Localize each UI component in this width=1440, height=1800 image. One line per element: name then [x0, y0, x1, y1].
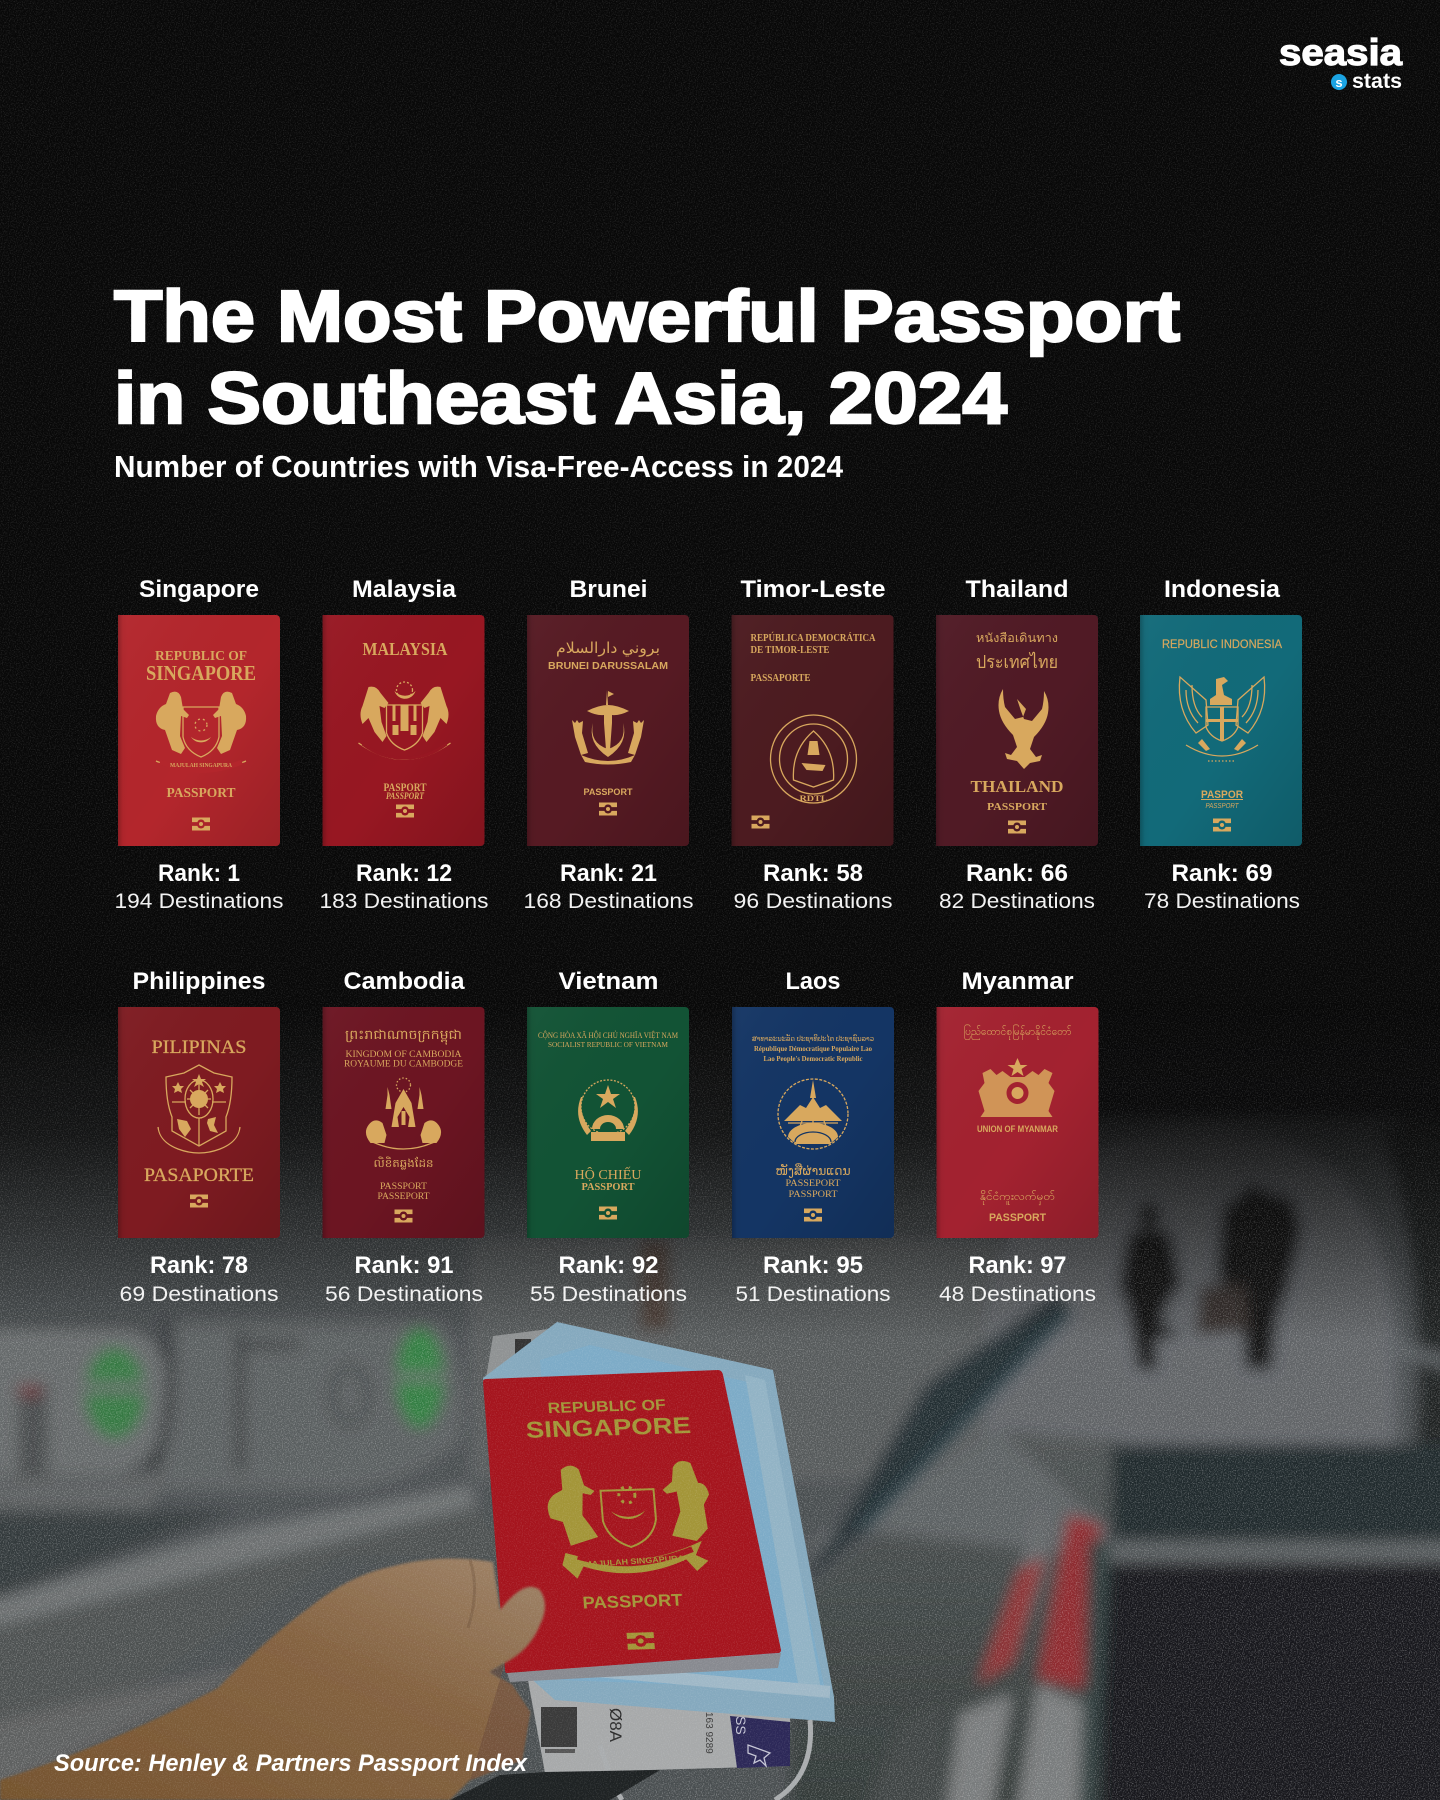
passport: Vietnam: HỘ CHIẾU [574, 1166, 642, 1183]
passport: Cambodia: PASSPORT [380, 1181, 428, 1191]
passport: Myanmar: PASSPORT [989, 1212, 1046, 1224]
passport: Laos: PASSEPORT [786, 1179, 841, 1189]
boarding pass bottom [527, 1675, 790, 1773]
destinations: 194 Destinations [114, 889, 284, 913]
card: Myanmar [936, 968, 1098, 1306]
dark gap below pass [450, 1770, 660, 1800]
rank: Rank: 69 [1172, 860, 1272, 887]
card: Thailand [936, 576, 1098, 913]
passport: Laos: ສາທາລະນະລັດ ປະຊາທິປະໄຕ ປະຊາຊົນລາວ [752, 1033, 874, 1043]
passport: Myanmar: UNION OF MYANMAR [977, 1124, 1058, 1135]
country name: Laos [786, 968, 840, 995]
passport: Thailand: PASSPORT [987, 801, 1048, 813]
card: Vietnam [527, 968, 689, 1306]
passport: Indonesia: PASPOR [1201, 789, 1243, 801]
logo: seasia stats: stats [1352, 70, 1402, 93]
card: Philippines [118, 968, 280, 1306]
passport: Cambodia: PASSEPORT [378, 1191, 430, 1201]
passport: Indonesia: PASSPORT [1206, 801, 1240, 810]
passport: Malaysia [322, 615, 484, 846]
passport: Laos: PASSPORT [788, 1190, 838, 1200]
title: in Southeast Asia, 2024 [114, 359, 1007, 439]
rank: Rank: 78 [150, 1252, 248, 1279]
hero passport: Singapore: SINGAPORE [525, 1412, 692, 1443]
destinations: 56 Destinations [325, 1282, 483, 1306]
passport: Cambodia: ROYAUME DU CAMBODGE [344, 1060, 463, 1070]
face mask [483, 1322, 835, 1800]
destinations: 69 Destinations [120, 1282, 278, 1306]
centre wall [470, 1240, 1030, 1480]
passport: Indonesia: REPUBLIC INDONESIA [1162, 639, 1282, 651]
boarding pass bottom: SS [733, 1716, 749, 1735]
card: Cambodia [322, 968, 484, 1306]
left handrail [0, 1470, 170, 1510]
card: Indonesia [1140, 576, 1302, 913]
passport: Timor-Leste: DE TIMOR-LESTE [750, 645, 830, 656]
destinations: 48 Destinations [939, 1282, 1096, 1306]
passport: Brunei: بروني دارالسلام [556, 640, 660, 658]
passport: Malaysia: PASPORT [384, 780, 426, 794]
passport: Vietnam: PASSPORT [582, 1182, 634, 1193]
title: The Most Powerful Passport [114, 277, 1180, 357]
passport: Timor-Leste: REPÚBLICA DEMOCRÁTICA [750, 632, 876, 644]
passport: Malaysia: MALAYSIA [362, 639, 448, 659]
passport: Thailand [936, 615, 1098, 846]
card: Malaysia [320, 576, 488, 913]
passport: Timor-Leste [732, 615, 894, 846]
rank: Rank: 95 [763, 1252, 863, 1279]
passport: Vietnam: CỘNG HÒA XÃ HỘI CHỦ NGHĨA VIỆT NAM [538, 1030, 678, 1040]
passport: Laos: République Démocratique Populaire Lao [754, 1045, 872, 1053]
country name: Brunei [570, 576, 648, 603]
rank: Rank: 97 [968, 1252, 1066, 1279]
card: Timor-Leste [732, 576, 894, 913]
country name: Thailand [966, 576, 1068, 603]
rank: Rank: 91 [354, 1252, 454, 1279]
passport: Thailand: ประเทศไทย [976, 651, 1058, 672]
rank: Rank: 92 [558, 1252, 658, 1279]
hero passport: Singapore [483, 1370, 781, 1682]
passport: Philippines: PASAPORTE [144, 1165, 254, 1186]
card: Brunei [524, 576, 694, 913]
boarding pass bottom: 163 9289 [703, 1712, 714, 1754]
boarding pass bottom: Ø8A [606, 1708, 625, 1743]
passport: Timor-Leste: RDTL [800, 794, 828, 803]
card: Singapore [114, 576, 284, 913]
country name: Philippines [132, 968, 266, 995]
passport: Laos: ໜັງສືຜ່ານແດນ [776, 1163, 851, 1178]
subtitle: Number of Countries with Visa-Free-Access in 2024 [114, 449, 844, 484]
hero passport: Singapore: REPUBLIC OF [547, 1397, 666, 1417]
boarding pass top [486, 1328, 560, 1378]
passport: Singapore: REPUBLIC OF [155, 649, 247, 664]
destinations: 96 Destinations [734, 889, 892, 913]
passport: Malaysia: PASSPORT [386, 792, 425, 802]
rank: Rank: 12 [356, 860, 452, 887]
passport: Myanmar: နိုင်ငံကူးလက်မှတ် [980, 1190, 1055, 1205]
country name: Myanmar [962, 968, 1074, 995]
passport: Brunei [527, 615, 689, 846]
passport: Philippines: PILIPINAS [152, 1037, 246, 1058]
passport: Thailand: THAILAND [970, 777, 1064, 796]
logo: seasia stats: seasia [1279, 32, 1402, 73]
country name: Indonesia [1164, 576, 1281, 603]
destinations: 51 Destinations [736, 1282, 890, 1306]
hero passport: Singapore: MAJULAH SINGAPURA [584, 1554, 685, 1569]
country name: Timor-Leste [740, 576, 886, 603]
rank: Rank: 21 [560, 860, 657, 887]
logo dot: s [1335, 75, 1343, 90]
passport: Singapore: PASSPORT [166, 785, 236, 800]
country name: Malaysia [352, 576, 457, 603]
passport: Cambodia: KINGDOM OF CAMBODIA [346, 1050, 462, 1060]
passport: Myanmar [936, 1007, 1098, 1238]
rank: Rank: 66 [966, 860, 1068, 887]
passport: Cambodia [322, 1007, 484, 1238]
red panels [1018, 1539, 1052, 1602]
country name: Vietnam [558, 968, 658, 995]
passport: Laos: Lao People's Democratic Republic [764, 1055, 862, 1063]
passport: Singapore: MAJULAH SINGAPURA [170, 763, 233, 769]
left glass balustrade [0, 1325, 172, 1478]
rank: Rank: 1 [158, 860, 240, 887]
passport: Singapore [118, 615, 280, 846]
background photo: airport walkway [0, 1063, 1440, 1800]
centre floor [790, 1430, 1120, 1800]
photo: boarding pass and face mask [0, 1322, 835, 1800]
travellers [1137, 1202, 1161, 1226]
card: Laos [732, 968, 894, 1306]
passport: Indonesia [1140, 615, 1302, 846]
passport: Brunei: PASSPORT [584, 787, 633, 798]
passport: Cambodia: លិខិតឆ្លងដែន [374, 1156, 434, 1170]
moving walkway rail [800, 1290, 1070, 1590]
arch wall [986, 1174, 1400, 1451]
hero passport: Singapore: PASSPORT [582, 1591, 684, 1613]
passport: Vietnam [527, 1007, 689, 1238]
passport: Thailand: หนังสือเดินทาง [976, 631, 1058, 645]
passport: Philippines [118, 1007, 280, 1238]
destinations: 55 Destinations [530, 1282, 687, 1306]
logo: seasia stats [1279, 32, 1402, 93]
destinations: 168 Destinations [524, 889, 694, 913]
destinations: 78 Destinations [1144, 889, 1300, 913]
source note: Source: Henley & Partners Passport Index [54, 1750, 529, 1777]
passport: Cambodia: ព្រះរាជាណាចក្រកម្ពុជា [345, 1027, 462, 1045]
passport: Vietnam: SOCIALIST REPUBLIC OF VIETNAM [548, 1040, 668, 1049]
passport: Brunei: BRUNEI DARUSSALAM [548, 660, 668, 672]
passport: Laos [732, 1007, 894, 1238]
hand holding the passport [0, 1558, 545, 1800]
title [114, 277, 1180, 439]
country name: Singapore [139, 576, 259, 603]
passport: Singapore: SINGAPORE [146, 661, 256, 685]
passport: Timor-Leste: PASSAPORTE [750, 673, 811, 684]
floor far [1111, 1444, 1440, 1542]
rank: Rank: 58 [763, 860, 863, 887]
passport: Myanmar: ပြည်ထောင်စုမြန်မာနိုင်ငံတော် [964, 1024, 1072, 1040]
destinations: 183 Destinations [320, 889, 488, 913]
destinations: 82 Destinations [939, 889, 1095, 913]
country name: Cambodia [344, 968, 465, 995]
